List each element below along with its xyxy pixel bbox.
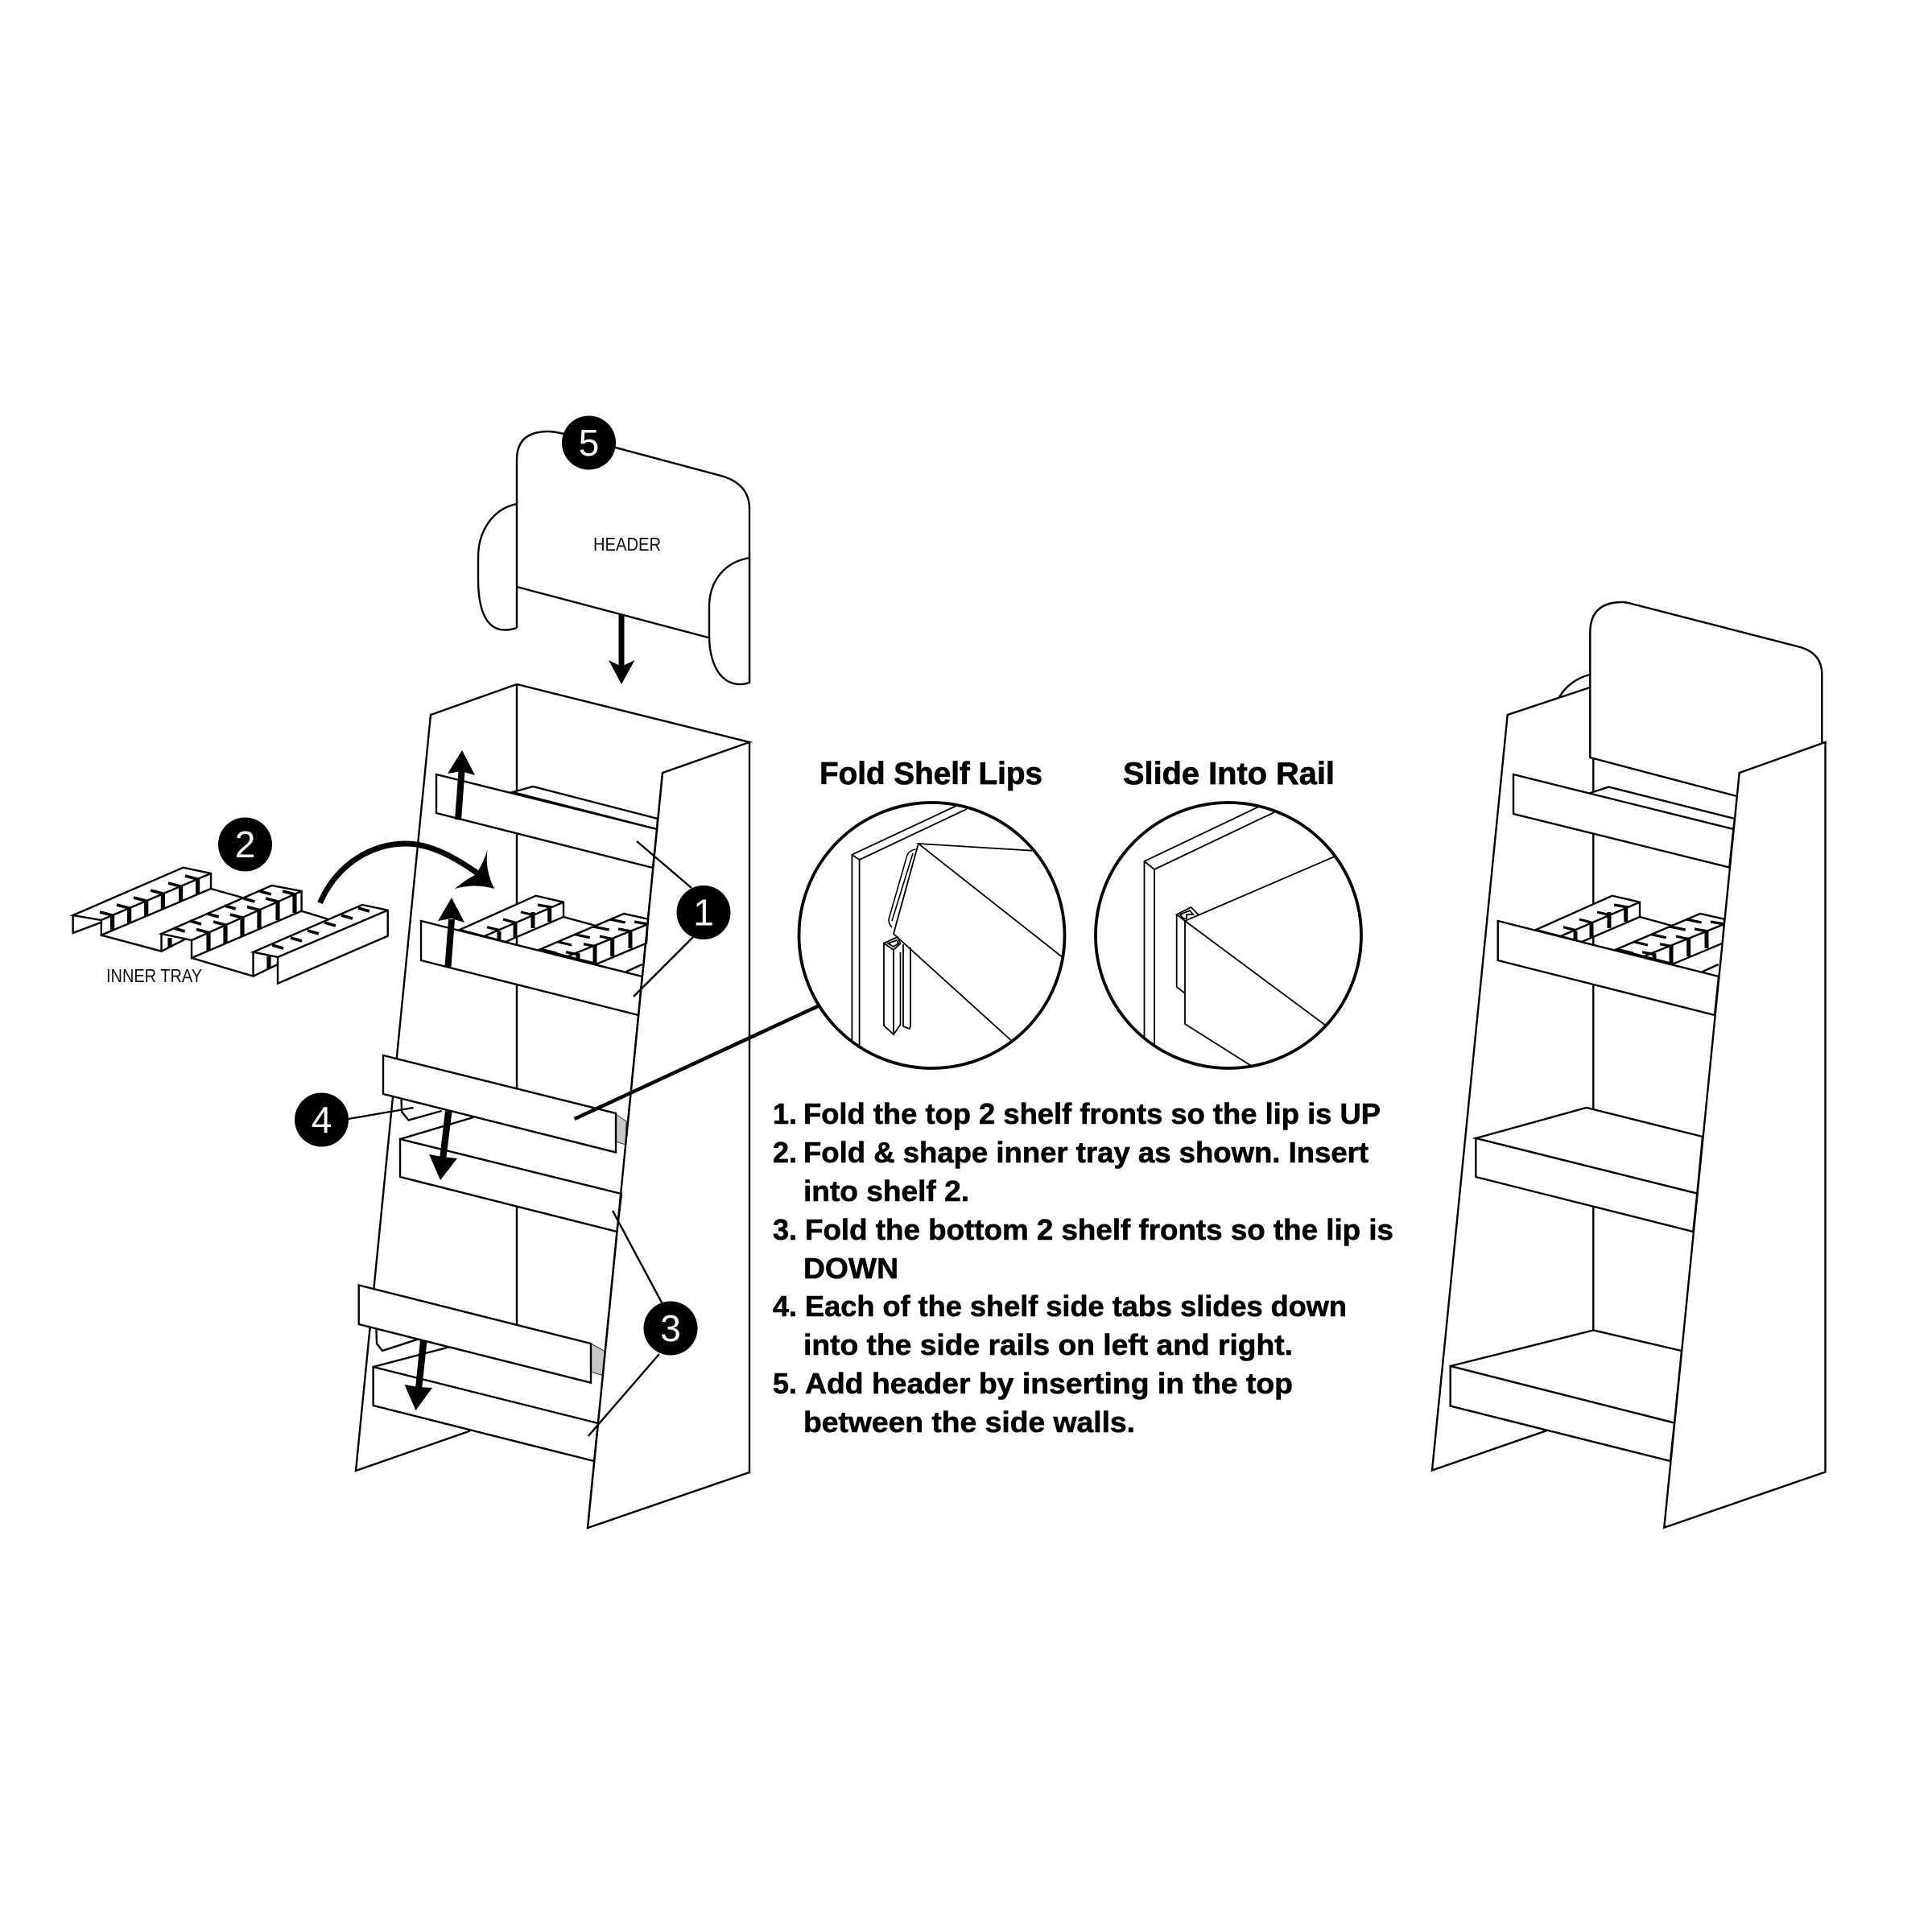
arrow: shelf 3 lip down bbox=[429, 1111, 457, 1180]
arrow: shelf 4 lip down bbox=[404, 1340, 432, 1410]
step 2 bbox=[773, 1136, 1368, 1208]
detail circle: slide into rail bbox=[1096, 803, 1361, 1068]
badge 5 bbox=[562, 415, 616, 470]
step 1: Fold the top 2 shelf fronts so the lip is UP bbox=[803, 1097, 1381, 1130]
shelf 1 bbox=[1513, 774, 1735, 868]
back centre line bbox=[1592, 758, 1595, 1330]
badge 3 bbox=[644, 1301, 697, 1356]
arrow: shelf 1 lip up bbox=[448, 750, 475, 820]
step 1: 1. bbox=[773, 1097, 797, 1130]
badge 5: 5 bbox=[579, 422, 599, 464]
header piece (exploded) bbox=[478, 431, 749, 684]
step 2: 2. bbox=[773, 1136, 797, 1169]
shelf 2 with inner tray bbox=[421, 896, 648, 1015]
tower frame bbox=[356, 684, 749, 1528]
step 3 bbox=[773, 1213, 1393, 1285]
detail circle: fold shelf lips bbox=[799, 803, 1064, 1068]
arrow: shelf 2 lip up bbox=[438, 898, 464, 967]
right side wall bbox=[1664, 742, 1826, 1528]
rail cap bbox=[1177, 907, 1199, 921]
wall edge bbox=[1145, 807, 1274, 1046]
shelf 3 bbox=[1476, 1108, 1703, 1232]
badge 2 bbox=[218, 818, 272, 871]
step 2: into shelf 2. bbox=[803, 1174, 969, 1208]
badge 2: 2 bbox=[235, 824, 255, 865]
header ears bbox=[1559, 675, 1822, 755]
badge 1: 1 bbox=[693, 892, 714, 934]
step 5 bbox=[773, 1367, 1293, 1439]
badge 1 bbox=[676, 886, 731, 939]
step 5: 5. bbox=[773, 1367, 797, 1400]
right side wall edge bbox=[588, 773, 663, 1528]
folded lip bbox=[894, 844, 1063, 1041]
inner tray label: INNER TRAY bbox=[106, 965, 202, 986]
left side wall bbox=[1432, 687, 1590, 1470]
heading: slide into rail: Slide Into Rail bbox=[1123, 757, 1335, 791]
step 2: Fold & shape inner tray as shown. Insert bbox=[803, 1136, 1368, 1169]
assembly instructions bbox=[773, 1097, 1393, 1439]
inner tray part bbox=[73, 868, 388, 986]
heading: fold shelf lips: Fold Shelf Lips bbox=[819, 757, 1042, 791]
step 5: Add header by inserting in the top bbox=[805, 1367, 1293, 1400]
step 4 bbox=[773, 1290, 1347, 1361]
rail bbox=[884, 937, 910, 1034]
step 3: DOWN bbox=[803, 1252, 898, 1285]
header label: HEADER bbox=[593, 534, 661, 555]
finished display (right tower) bbox=[1432, 602, 1826, 1528]
leader lines: step callouts bbox=[348, 841, 693, 1436]
step 4: into the side rails on left and right. bbox=[803, 1328, 1293, 1361]
badge 4 bbox=[295, 1093, 349, 1146]
pointer line to detail circle bbox=[575, 1005, 819, 1119]
step 3: Fold the bottom 2 shelf fronts so the lip is bbox=[805, 1213, 1393, 1246]
shelf 3 with lowered lip bbox=[383, 1055, 636, 1232]
step 3: 3. bbox=[773, 1213, 797, 1246]
curved arrow: tray into shelf bbox=[320, 844, 494, 903]
badge 4: 4 bbox=[312, 1099, 332, 1141]
step 4: 4. bbox=[773, 1290, 797, 1323]
badge 3: 3 bbox=[660, 1307, 681, 1349]
wall edge bbox=[852, 806, 967, 1046]
step 5: between the side walls. bbox=[803, 1406, 1135, 1439]
arrow: header down bbox=[609, 614, 634, 684]
left tower assembly bbox=[356, 684, 749, 1528]
shelf 4 bbox=[1451, 1330, 1682, 1461]
shelf 2 with tray bbox=[1498, 896, 1724, 1015]
shelf 1 with raised lip bbox=[436, 774, 658, 868]
shelf 4 with lowered lip bbox=[359, 1285, 605, 1461]
step 4: Each of the shelf side tabs slides down bbox=[805, 1290, 1347, 1323]
header panel bbox=[1590, 602, 1822, 796]
shelf in rail bbox=[1177, 857, 1335, 1067]
